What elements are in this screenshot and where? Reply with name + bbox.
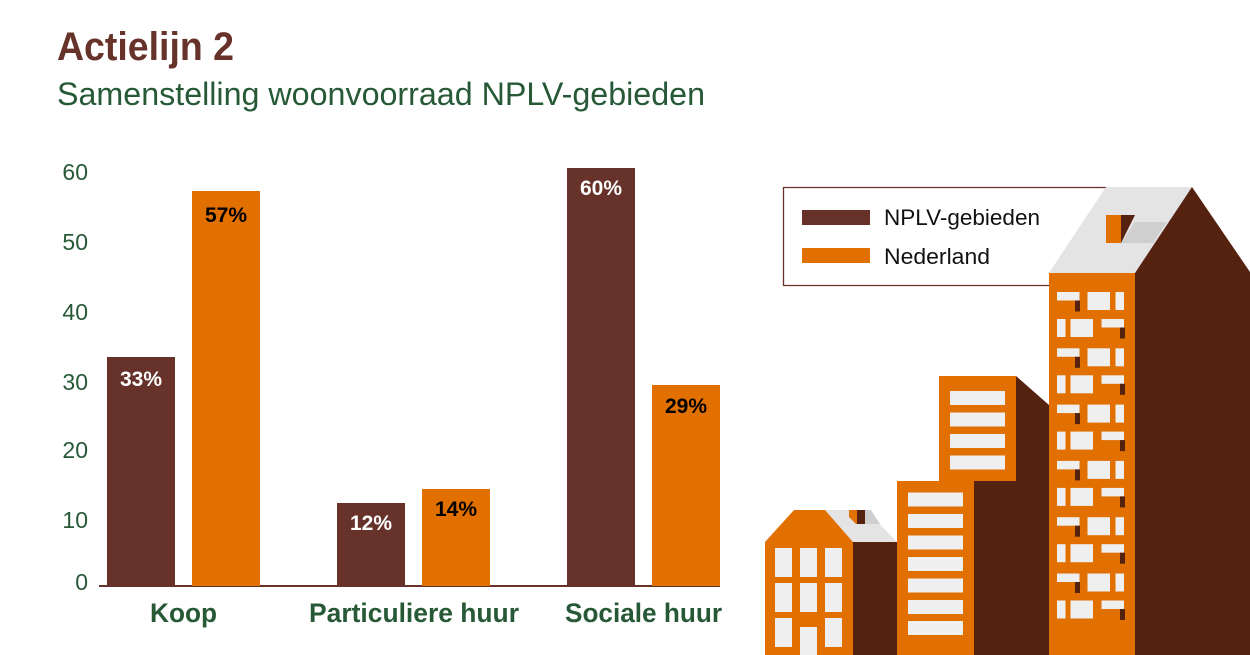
y axis labels: 60 bbox=[62, 159, 88, 185]
bar: Sociale huur NPLV 60% bbox=[567, 168, 635, 586]
y axis labels: 30 bbox=[62, 369, 88, 395]
legend label: Nederland: Nederland bbox=[884, 244, 990, 269]
category labels: Sociale huur bbox=[565, 598, 722, 628]
bar: Sociale huur Nederland 29% bbox=[652, 385, 720, 586]
title: Actielijn 2 bbox=[57, 25, 234, 69]
illustration: buildings bbox=[765, 187, 1250, 655]
category labels: Particuliere huur bbox=[309, 598, 519, 628]
bar: Sociale huur NPLV 60%: 60% bbox=[580, 177, 622, 200]
legend swatch: NPLV-gebieden bbox=[802, 210, 870, 225]
x axis line bbox=[99, 585, 720, 587]
category labels: Koop bbox=[150, 598, 217, 628]
bar: Koop Nederland 57%: 57% bbox=[205, 204, 247, 227]
bar chart bbox=[107, 168, 720, 586]
bar: Particuliere huur NPLV 12%: 12% bbox=[350, 512, 392, 535]
y axis labels bbox=[62, 159, 88, 595]
bar: Particuliere huur Nederland 14% bbox=[422, 489, 490, 586]
y axis labels: 20 bbox=[62, 437, 88, 463]
building: tall tower bbox=[1049, 187, 1250, 655]
y axis labels: 0 bbox=[75, 569, 88, 595]
subtitle: Samenstelling woonvoorraad NPLV-gebieden bbox=[57, 76, 705, 112]
building: small house bbox=[765, 510, 897, 655]
bar: Sociale huur Nederland 29%: 29% bbox=[665, 395, 707, 418]
y axis labels: 50 bbox=[62, 229, 88, 255]
legend swatch: Nederland bbox=[802, 248, 870, 263]
legend label: NPLV-gebieden: NPLV-gebieden bbox=[884, 205, 1040, 230]
category labels bbox=[150, 598, 722, 628]
bar: Particuliere huur NPLV 12% bbox=[337, 503, 405, 586]
y axis labels: 40 bbox=[62, 299, 88, 325]
legend bbox=[784, 188, 1106, 286]
bar: Koop NPLV 33%: 33% bbox=[120, 368, 162, 391]
bar: Koop NPLV 33% bbox=[107, 357, 175, 586]
bar: Koop Nederland 57% bbox=[192, 191, 260, 586]
bar: Particuliere huur Nederland 14%: 14% bbox=[435, 498, 477, 521]
building: mid-rise bbox=[897, 376, 1049, 655]
y axis labels: 10 bbox=[62, 507, 88, 533]
